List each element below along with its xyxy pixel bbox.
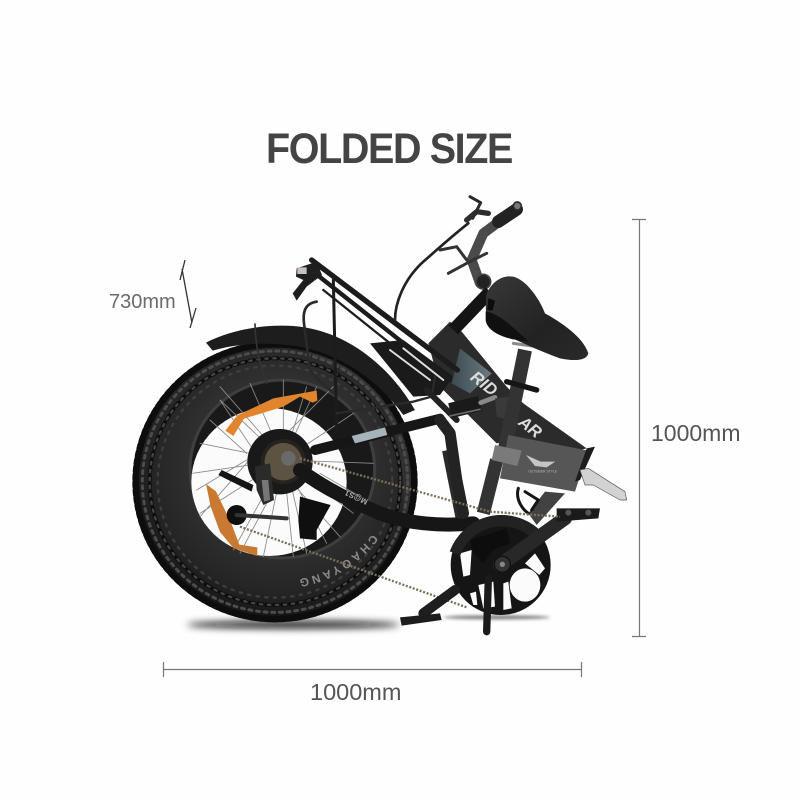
crank and right pedal [494, 508, 600, 572]
folded frame and battery: RID [467, 367, 501, 400]
dimension: folded depth 730mm [109, 260, 196, 328]
folding pedal silver [580, 468, 627, 500]
rear lower swing arm: M@S1 [343, 488, 369, 506]
tyre lettering: CHAOYANG [300, 536, 377, 586]
brake cable [395, 223, 468, 320]
kickstand and left pedal [400, 578, 488, 632]
main tube behind the rear wheel [448, 450, 462, 517]
seat post and folded main tube [483, 343, 537, 513]
tail light [293, 262, 322, 301]
rear lower swing arm [300, 470, 473, 525]
rear shock absorber [440, 397, 510, 513]
orange rim decal upper [225, 391, 317, 436]
rear cassette and derailleur [218, 429, 331, 540]
dimension: folded depth 730mm: 730mm [109, 291, 176, 313]
chainring [451, 515, 551, 615]
spokes [193, 380, 373, 557]
head tube link [453, 292, 490, 330]
folded bike illustration [132, 195, 627, 636]
folded frame and battery [428, 322, 587, 453]
orange rim decal lower [206, 484, 257, 556]
dimension: folded height 1000mm: 1000mm [651, 420, 740, 446]
rear fender [206, 326, 415, 415]
title: FOLDED SIZE [266, 125, 512, 173]
frame gusset with logo [492, 435, 595, 525]
dimension: folded length 1000mm [163, 662, 582, 705]
saddle [486, 276, 588, 360]
rear upper swing arm [315, 419, 440, 450]
chain [240, 458, 560, 607]
folded frame and battery: AR [514, 412, 546, 442]
frame gusset with logo: OUTSIDER STYLE [528, 470, 558, 474]
dimension: folded height 1000mm [632, 219, 740, 636]
rear rack [255, 260, 457, 432]
white opening through the wheel [191, 408, 347, 556]
ground shadow [187, 615, 550, 628]
rear fat tyre [132, 344, 418, 622]
rim disc with dark inner tyre wall [190, 380, 375, 558]
dimension: folded length 1000mm: 1000mm [310, 679, 401, 705]
handlebar and stem [440, 197, 521, 289]
dark mass beneath the rack [370, 340, 453, 397]
